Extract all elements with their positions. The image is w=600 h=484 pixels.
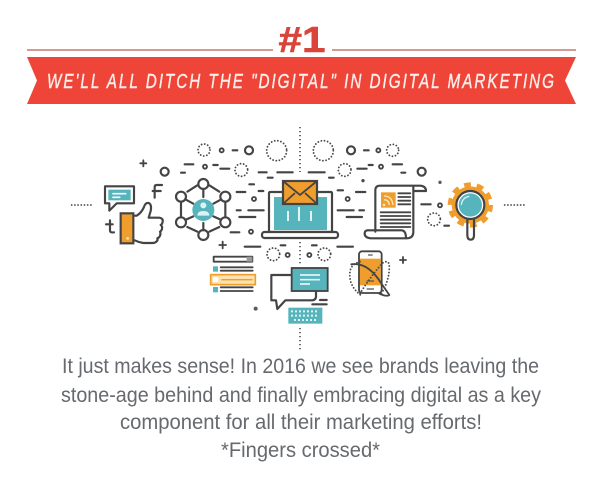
icon: social network hexagon — [176, 179, 230, 240]
paragraph line 4: *Fingers crossed* — [221, 439, 380, 462]
illustration: left half — [72, 141, 293, 243]
icon: gear with magnifying glass — [450, 185, 490, 240]
heading rule left — [27, 49, 273, 51]
center dotted divider — [299, 127, 301, 352]
paragraph line 1: It just makes sense! In 2016 we see brands leaving the — [62, 355, 539, 378]
paragraph line 3: component for all their marketing efforts! — [120, 411, 482, 434]
heading rule right — [332, 49, 576, 51]
dotted lead line right — [505, 202, 527, 208]
dashes between network and laptop — [231, 184, 264, 234]
icon: newsletter scroll — [365, 186, 426, 238]
icon: envelope — [283, 181, 317, 204]
dashes and circles under laptop — [219, 242, 406, 311]
floating circles and dashes, upper left — [140, 141, 293, 178]
title: #1: #1 — [278, 19, 326, 60]
body paragraph — [61, 355, 541, 462]
red ribbon banner — [27, 57, 576, 104]
icon: keyboard — [288, 308, 322, 324]
illustration: lower half — [211, 242, 406, 324]
icon: list interface — [211, 257, 255, 292]
icon: thumbs up — [121, 203, 163, 243]
connector dashes and circles — [421, 203, 449, 226]
paragraph line 2: stone-age behind and finally embracing digital as a key — [61, 384, 541, 407]
icon: facebook f — [153, 185, 162, 198]
icon: tumblr t — [106, 220, 114, 232]
icon: laptop with envelope — [262, 181, 338, 238]
icon: speech bubble — [105, 186, 134, 211]
icon: smartphone with orbits — [350, 251, 389, 296]
floating circles and dashes, upper right — [309, 141, 442, 217]
dotted lead line left — [72, 202, 93, 208]
illustration: right half — [309, 141, 527, 240]
icon: chat bubbles and monitor — [271, 268, 328, 309]
